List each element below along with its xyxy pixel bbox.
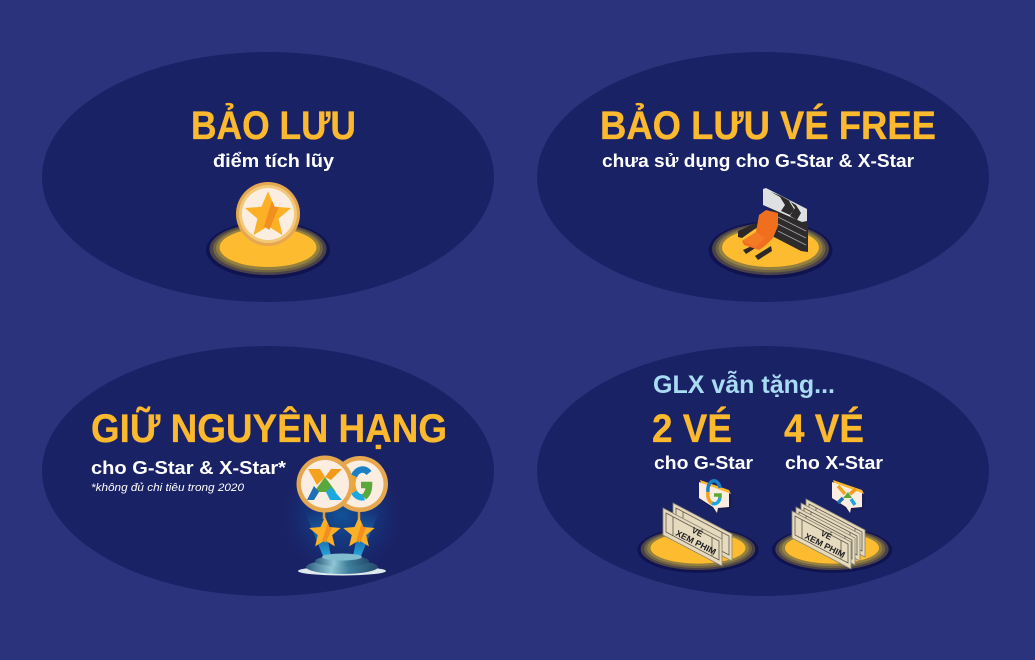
icon: four tickets on stage with X bubble: VÉ xyxy=(819,528,834,542)
heading: bảo lưu vé free: BẢO LƯU VÉ FREE xyxy=(600,102,936,148)
text: cho g-star x-star: cho G-Star & X-Star* xyxy=(91,458,286,478)
panel: bảo lưu điểm tích lũy xyxy=(42,52,494,302)
text: cho g-star: cho G-Star xyxy=(654,453,753,473)
icon: two tickets on stage with G bubble: XEM PHIM xyxy=(674,528,718,557)
X bubble xyxy=(832,480,865,515)
icon: four tickets on stage with X bubble xyxy=(772,480,892,573)
X logo xyxy=(307,469,342,500)
icon: two tickets on stage with G bubble: VÉ xyxy=(690,525,705,539)
heading: giữ nguyên hạng: GIỮ NGUYÊN HẠNG xyxy=(91,405,447,451)
G bubble xyxy=(699,480,732,515)
heading: 2 vé: 2 VÉ xyxy=(652,406,732,451)
panel: giữ nguyên hạng xyxy=(42,346,494,596)
panel: glx vẫn tặng xyxy=(537,346,989,596)
clapper body xyxy=(772,205,808,252)
text: cho x-star: cho X-Star xyxy=(785,453,883,473)
heading: 4 vé: 4 VÉ xyxy=(784,406,864,451)
heading: glx vẫn tặng: GLX vẫn tặng... xyxy=(653,369,835,399)
footnote: *không đủ chi tiêu trong 2020 xyxy=(91,482,245,494)
panel: bảo lưu vé free xyxy=(537,52,989,302)
heading: bảo lưu: BẢO LƯU xyxy=(191,102,356,148)
icon: cinema seat and clapperboard on stage xyxy=(708,188,832,278)
clapper stripes xyxy=(763,188,807,222)
text: chưa sử dụng: chưa sử dụng cho G-Star & X-Star xyxy=(602,151,914,171)
chair xyxy=(738,223,759,238)
G logo xyxy=(352,470,369,497)
icon: two tickets on stage with G bubble xyxy=(637,480,759,573)
icon: star coin on stage xyxy=(206,182,330,278)
text: điểm tích lũy: điểm tích lũy xyxy=(213,151,334,171)
icon: four tickets on stage with X bubble: XEM PHIM xyxy=(803,531,847,560)
icon: X and G medals on podium xyxy=(278,451,406,579)
